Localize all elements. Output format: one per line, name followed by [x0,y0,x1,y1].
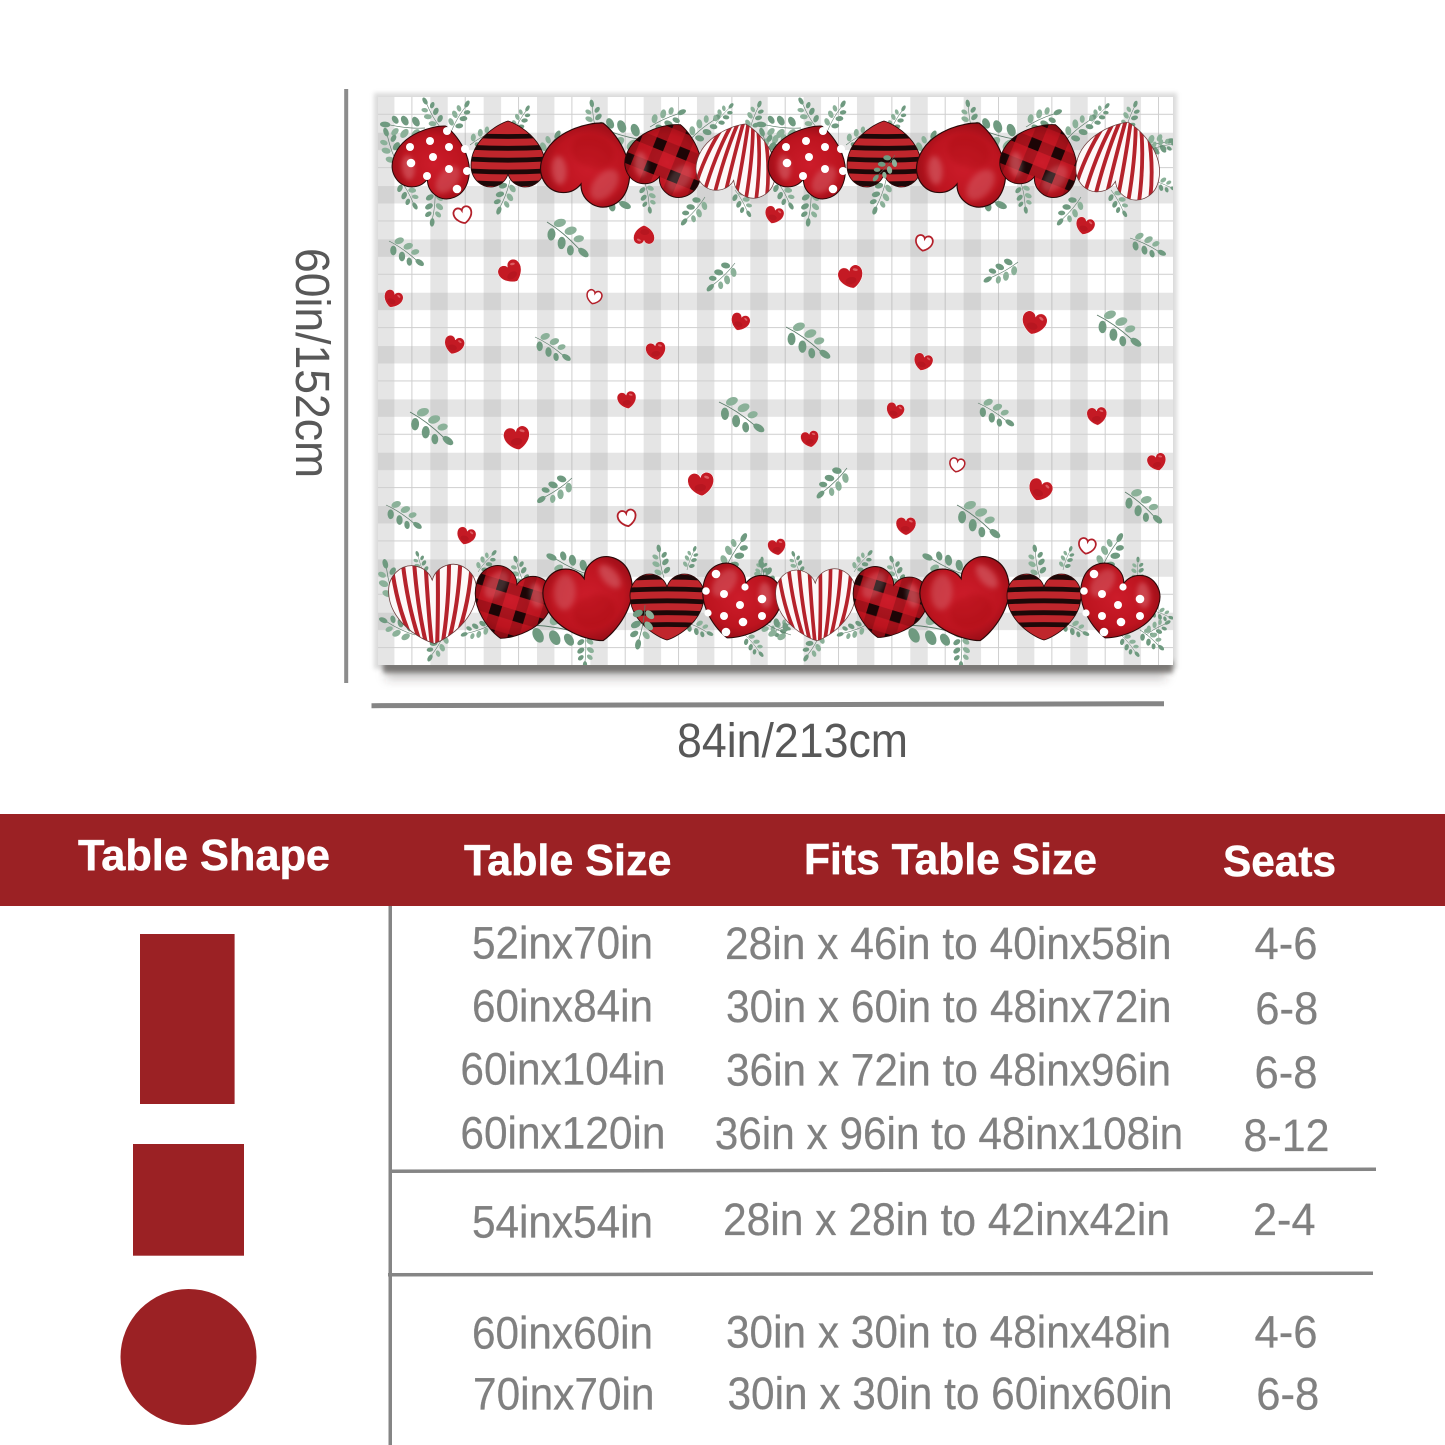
row 60inx84in: 6-8 [1255,983,1318,1034]
icon: rectangle table shape [140,934,235,1104]
tablecloth drop shadow [374,93,1177,679]
row 60inx60in: 4-6 [1254,1307,1318,1358]
header: fits table size: Fits Table Size [804,835,1097,884]
heart: buffalo plaid right [999,124,1076,198]
heart: black striped right [1006,574,1081,640]
square size row [472,1194,1316,1248]
row 52inx70in [472,918,1318,969]
gingham plaid cloth background [378,97,1173,665]
square size row: 54inx54in [472,1196,653,1248]
scattered outline hearts [452,205,1097,555]
row 70inx70in [473,1368,1319,1419]
row 60inx84in: 30in x 60in to 48inx72in [726,981,1172,1032]
heart: solid red right [919,556,1010,642]
square size row: 2-4 [1253,1194,1316,1245]
heart: buffalo plaid left [474,565,549,639]
table grid rules [388,906,1376,1445]
heart: polka dot left [386,113,483,205]
icon: square table shape [133,1144,244,1256]
heart: buffalo plaid right [852,566,925,638]
heart: black striped left [470,120,544,188]
row 60inx104in: 60inx104in [460,1044,665,1094]
heart: polka dot right [768,126,846,200]
heart: polka dot right [1080,562,1161,638]
heart: polka dot left [689,557,788,651]
icon: round table shape [120,1289,256,1425]
heart: black striped left [630,574,704,640]
row 60inx60in: 60inx60in [472,1307,653,1358]
row 52inx70in: 28in x 46in to 40inx58in [725,918,1172,969]
row 52inx70in: 52inx70in [472,918,653,968]
width dimension rule [372,701,1164,708]
heart: white striped left [388,564,476,644]
heart: white striped right [775,568,854,642]
row 60inx60in: 30in x 30in to 48inx48in [726,1307,1171,1358]
header: table size: Table Size [464,836,672,885]
rectangular sizes rows [460,918,1329,1161]
heart: white striped right [1075,122,1160,200]
header: table shape: Table Shape [78,831,330,880]
row 60inx104in: 6-8 [1254,1047,1318,1098]
row 60inx104in: 36in x 72in to 48inx96in [726,1045,1171,1096]
row 60inx120in [460,1108,1329,1161]
table header band [0,814,1445,906]
heart: solid red right [916,122,1006,208]
row 60inx104in [460,1044,1317,1098]
row 60inx120in: 36in x 96in to 48inx108in [715,1108,1183,1159]
top garland of hearts and leaves [373,93,1179,232]
heart: buffalo plaid left [624,124,700,198]
height dimension label: 60in/152cm [285,248,338,478]
heart: solid red left [542,556,632,642]
scattered small solid hearts [381,205,1168,557]
row 70inx70in: 70inx70in [473,1368,654,1419]
round sizes rows [472,1307,1319,1419]
row 60inx120in: 60inx120in [460,1108,665,1158]
row 52inx70in: 4-6 [1254,918,1318,969]
scattered leaf sprigs [380,210,1171,548]
heart: solid red left [540,122,630,208]
square size row: 28in x 28in to 42inx42in [723,1194,1170,1245]
row 60inx60in [472,1307,1318,1358]
heart: black striped right [846,120,920,188]
height dimension rule [344,89,348,683]
row 70inx70in: 6-8 [1256,1368,1319,1419]
row 60inx120in: 8-12 [1244,1110,1330,1161]
row 60inx84in [472,981,1318,1034]
header: seats: Seats [1223,837,1336,886]
row 60inx84in: 60inx84in [472,981,653,1032]
width dimension label: 84in/213cm [677,715,908,768]
sprig over black heart [630,605,654,650]
heart: white striped left [696,124,774,199]
tablecloth product image [372,93,1179,679]
row 70inx70in: 30in x 30in to 60inx60in [728,1368,1172,1419]
bottom garland of hearts and leaves [372,527,1176,669]
